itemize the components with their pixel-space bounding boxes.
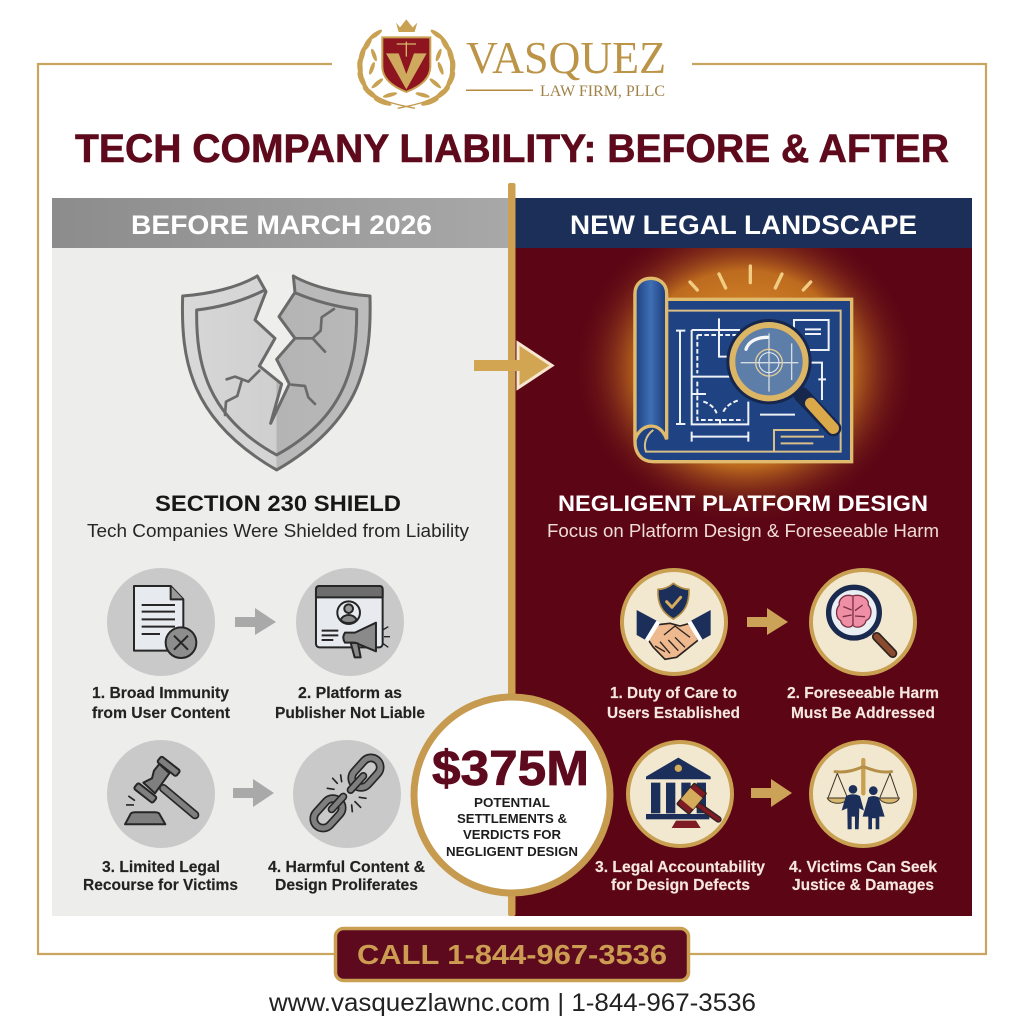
- left item 3: limited recourse: [83, 740, 238, 894]
- label: for Design Defects: [611, 877, 750, 894]
- text block: negligent platform design: [547, 491, 939, 541]
- blueprint roll: [635, 278, 667, 440]
- right item 2: foreseeable harm: [787, 570, 939, 722]
- label: [92, 685, 230, 722]
- label: [83, 859, 238, 894]
- section 230 heading: SECTION 230 SHIELD: [155, 491, 401, 516]
- new landscape panel background: [514, 248, 972, 916]
- callout caption: [446, 795, 578, 859]
- section 230 subheading: Tech Companies Were Shielded from Liability: [87, 520, 470, 541]
- label: Recourse for Victims: [83, 877, 238, 894]
- label: Users Established: [607, 705, 740, 722]
- new landscape heading: NEW LEGAL LANDSCAPE: [570, 210, 917, 240]
- call to action button: [336, 928, 688, 980]
- title: TECH COMPANY LIABILITY: BEFORE & AFTER: [75, 127, 949, 171]
- label: 1. Broad Immunity: [92, 685, 229, 702]
- label: [275, 685, 425, 722]
- blueprint drawing lines: [676, 318, 829, 442]
- left item 2: platform as publisher: [275, 568, 425, 722]
- logo wordmark: VASQUEZ: [466, 33, 666, 83]
- right item 1: duty of care: [607, 570, 740, 722]
- call to action text: CALL 1-844-967-3536: [357, 939, 667, 970]
- panel: before: [52, 198, 510, 916]
- callout caption: POTENTIAL: [474, 795, 550, 810]
- negligent design heading: NEGLIGENT PLATFORM DESIGN: [558, 491, 928, 516]
- right item 4: victims seek justice: [789, 742, 937, 894]
- blueprint glow: [592, 248, 898, 509]
- arrow: left step 1 to 2: [235, 608, 276, 635]
- label: Publisher Not Liable: [275, 705, 425, 722]
- label: 2. Foreseeable Harm: [787, 685, 939, 702]
- label: [595, 859, 765, 894]
- blueprint sheet: [635, 295, 852, 462]
- icon circle: handshake and shield: [622, 570, 726, 674]
- arrow: left step 3 to 4: [233, 779, 274, 807]
- icon circle: browser and megaphone: [296, 568, 404, 676]
- before heading: BEFORE MARCH 2026: [131, 210, 432, 240]
- label: Design Proliferates: [275, 877, 418, 894]
- label: 4. Victims Can Seek: [789, 859, 937, 876]
- arrow: before to after: [474, 343, 552, 388]
- text block: section 230 shield: [87, 491, 470, 541]
- icon circle: document rejected: [107, 568, 215, 676]
- callout caption: VERDICTS FOR: [463, 827, 562, 842]
- arrow: right step 1 to 2: [747, 608, 788, 635]
- logo: Vasquez Law Firm: [356, 19, 666, 108]
- before header bar: [52, 198, 510, 248]
- label: 3. Limited Legal: [102, 859, 220, 876]
- magnifying glass: [726, 319, 833, 428]
- icon circle: courthouse and gavel: [628, 742, 732, 846]
- label: 2. Platform as: [298, 685, 402, 702]
- callout caption: NEGLIGENT DESIGN: [446, 844, 578, 859]
- label: 1. Duty of Care to: [610, 685, 737, 702]
- icon circle: broken gavel: [107, 740, 215, 848]
- before panel background: [52, 248, 510, 916]
- icon: blueprint under magnifying glass: [592, 248, 898, 509]
- website and phone footer: www.vasquezlawnc.com | 1-844-967-3536: [268, 989, 756, 1017]
- callout circle: [414, 697, 610, 893]
- icon circle: scales and people: [811, 742, 915, 846]
- center gold divider: [508, 183, 516, 916]
- label: Must Be Addressed: [791, 705, 935, 722]
- callout caption: SETTLEMENTS &: [457, 811, 567, 826]
- callout: $375M: [414, 697, 610, 893]
- right item 3: legal accountability: [595, 742, 765, 894]
- label: [789, 859, 937, 894]
- label: Justice & Damages: [792, 877, 934, 894]
- logo rule: [466, 90, 533, 91]
- left item 1: broad immunity: [92, 568, 230, 722]
- icon circle: broken chain: [293, 740, 401, 848]
- logo subtitle: LAW FIRM, PLLC: [540, 83, 665, 100]
- panel: new landscape: [514, 198, 972, 916]
- glow rays: [690, 266, 811, 290]
- label: [268, 859, 425, 894]
- icon circle: brain under magnifier: [811, 570, 915, 674]
- label: 3. Legal Accountability: [595, 859, 765, 876]
- label: from User Content: [92, 705, 230, 722]
- negligent design subheading: Focus on Platform Design & Foreseeable Harm: [547, 520, 939, 541]
- arrow: right step 3 to 4: [751, 779, 792, 807]
- left item 4: harmful content: [268, 740, 425, 894]
- icon: broken shield: [182, 273, 370, 470]
- label: [607, 685, 740, 722]
- logo emblem: [356, 19, 457, 108]
- label: [787, 685, 939, 722]
- callout figure: $375M: [432, 742, 589, 796]
- new landscape header bar: [514, 198, 972, 248]
- label: 4. Harmful Content &: [268, 859, 425, 876]
